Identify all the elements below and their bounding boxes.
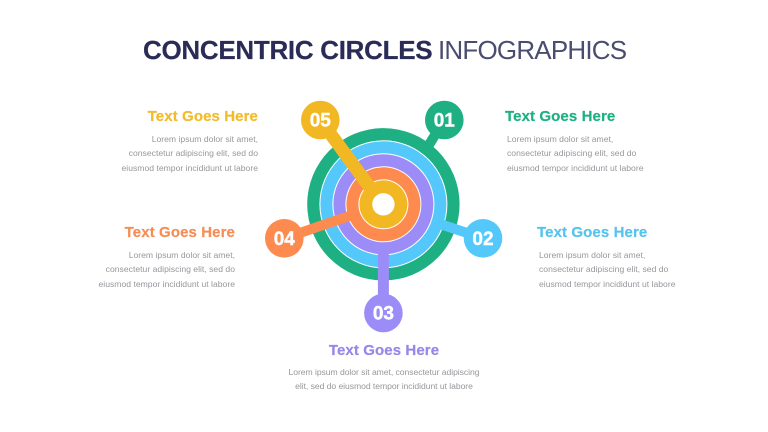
- heading: 01: Text Goes Here: [505, 108, 615, 125]
- heading: 02: Text Goes Here: [537, 224, 647, 241]
- title: [143, 35, 626, 65]
- connector: 02: [440, 224, 483, 238]
- node 04: [265, 219, 304, 258]
- text: 01: consectetur adipiscing elit, sed do: [507, 148, 636, 158]
- ring: purple: [333, 154, 433, 254]
- node 02: 02: [472, 229, 494, 250]
- text: 02: [539, 250, 676, 289]
- node 03: [364, 294, 403, 332]
- node 03: 03: [373, 304, 394, 325]
- text: 01: [507, 134, 644, 173]
- title: INFOGRAPHICS: [438, 35, 626, 65]
- ring: yellow: [359, 180, 407, 228]
- text: 02: consectetur adipiscing elit, sed do: [539, 264, 668, 274]
- ring: green: [307, 128, 460, 280]
- gap: orange: [358, 179, 408, 229]
- text: 01: eiusmod tempor incididunt ut labore: [507, 163, 644, 173]
- ring: orange: [346, 167, 420, 241]
- node 05: [301, 101, 340, 139]
- center hole: [372, 193, 395, 216]
- heading: 04: Text Goes Here: [125, 224, 235, 241]
- connector: 05: [320, 120, 374, 193]
- text: 04: eiusmod tempor incididunt ut labore: [98, 279, 235, 289]
- gap: green: [319, 140, 447, 268]
- gap: blue: [332, 153, 434, 255]
- text: 02: Lorem ipsum dolor sit amet,: [539, 250, 645, 260]
- ring: blue: [320, 141, 446, 267]
- text: 05: consectetur adipiscing elit, sed do: [129, 148, 258, 158]
- text: 04: [98, 250, 235, 289]
- text: 01: Lorem ipsum dolor sit amet,: [507, 134, 613, 144]
- node 04: 04: [274, 229, 295, 250]
- title: CONCENTRIC CIRCLES: [143, 35, 432, 65]
- text: 05: [122, 134, 258, 173]
- node 01: 01: [434, 111, 455, 132]
- text: 02: eiusmod tempor incididunt ut labore: [539, 279, 676, 289]
- heading: 03: Text Goes Here: [329, 342, 439, 359]
- heading: 05: Text Goes Here: [148, 108, 258, 125]
- text: 03: elit, sed do eiusmod tempor incididunt ut labore: [295, 381, 473, 391]
- connector: 03: [378, 250, 389, 313]
- gap: purple: [345, 166, 421, 242]
- text: 05: eiusmod tempor incididunt ut labore: [122, 163, 258, 173]
- connector: 04: [284, 214, 355, 238]
- node 02: [464, 219, 502, 258]
- text: 05: Lorem ipsum dolor sit amet,: [152, 134, 258, 144]
- text: 03: [289, 367, 479, 391]
- connector: 01: [427, 120, 444, 148]
- text: 04: Lorem ipsum dolor sit amet,: [129, 250, 235, 260]
- text: 04: consectetur adipiscing elit, sed do: [106, 264, 235, 274]
- node 05: 05: [310, 111, 331, 132]
- node 01: [425, 101, 464, 139]
- text: 03: Lorem ipsum dolor sit amet, consectetur adipiscing: [289, 367, 479, 377]
